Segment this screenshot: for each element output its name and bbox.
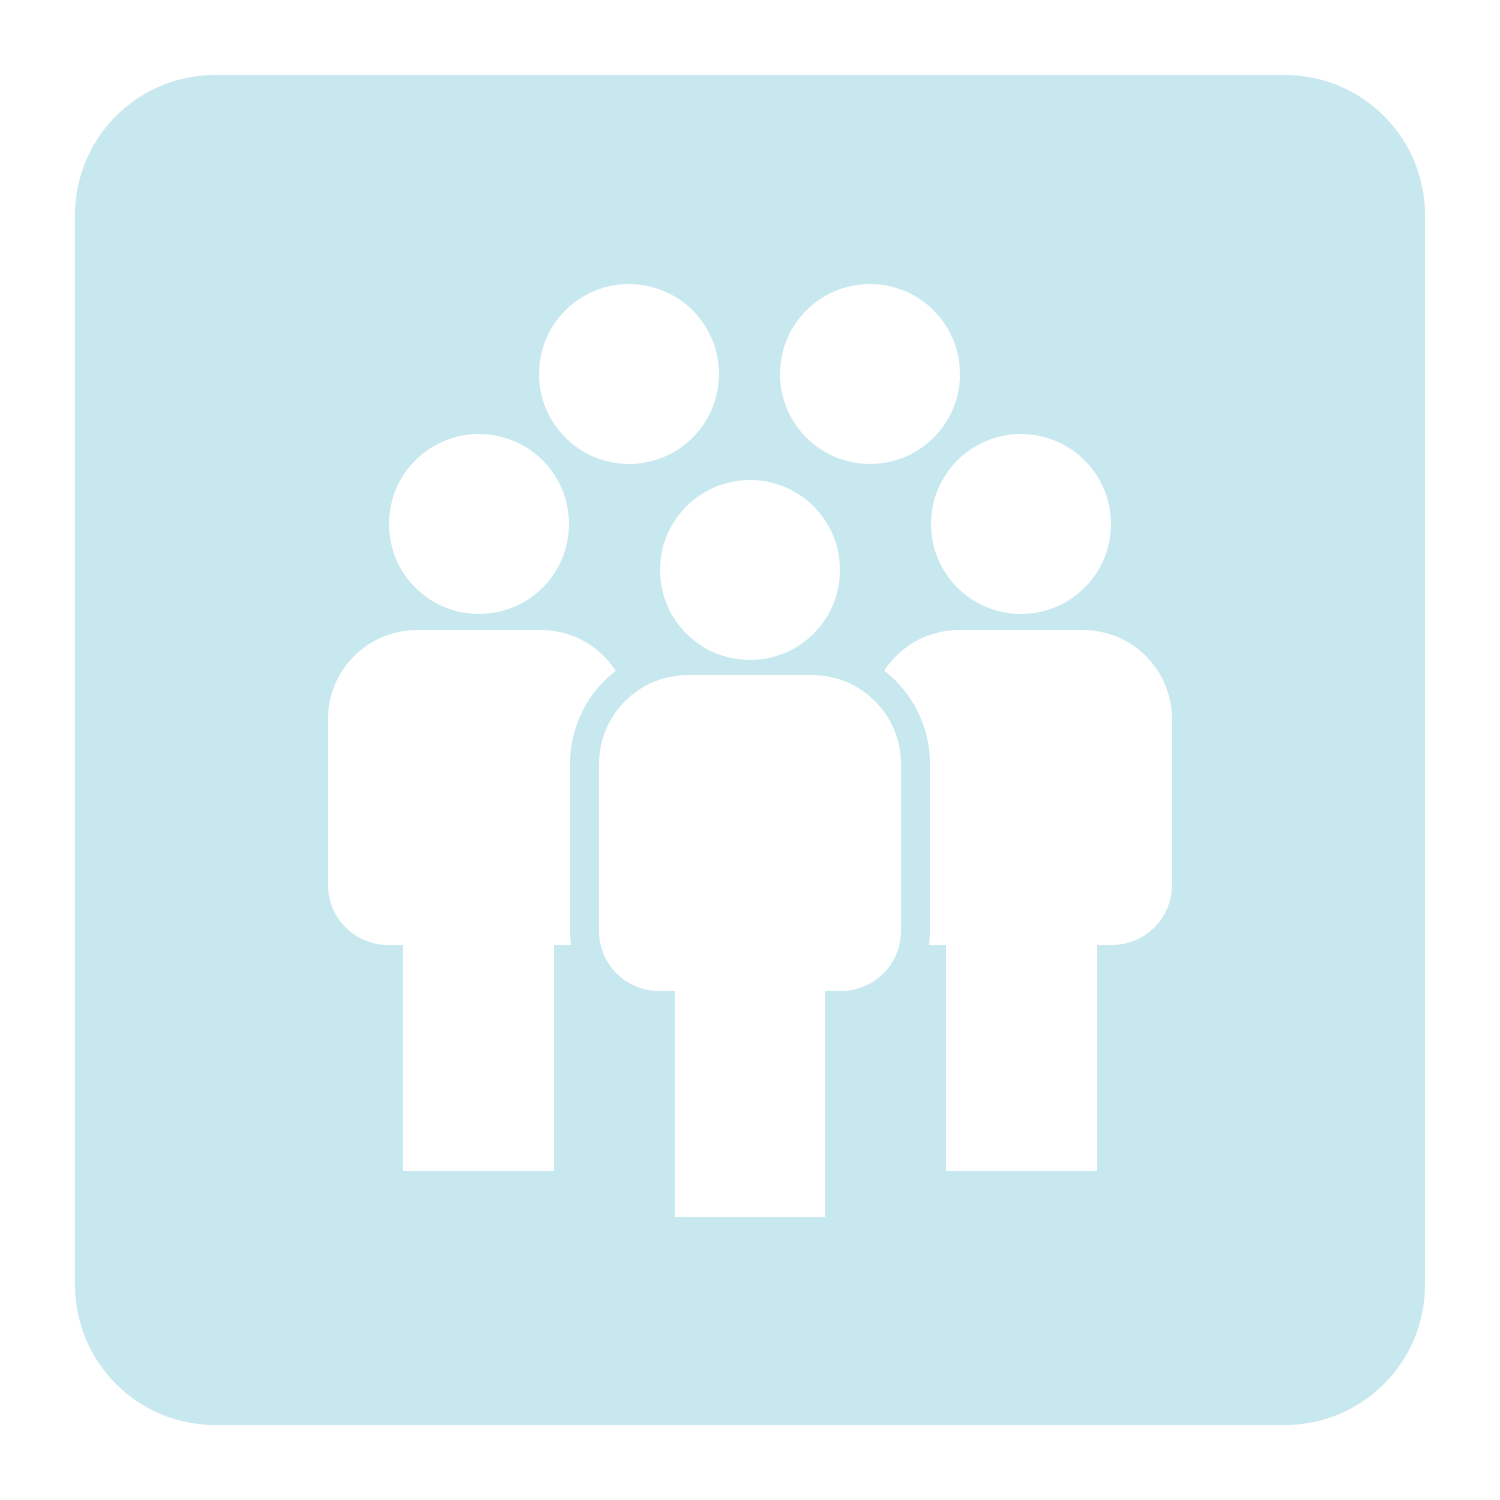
- figure: left person: [328, 434, 630, 1171]
- cutout gap around center body: [599, 675, 901, 991]
- figure: center person: [599, 480, 901, 1217]
- figure: right person: [870, 434, 1172, 1171]
- figure: back right head: [780, 284, 960, 464]
- figure: back left head: [539, 284, 719, 464]
